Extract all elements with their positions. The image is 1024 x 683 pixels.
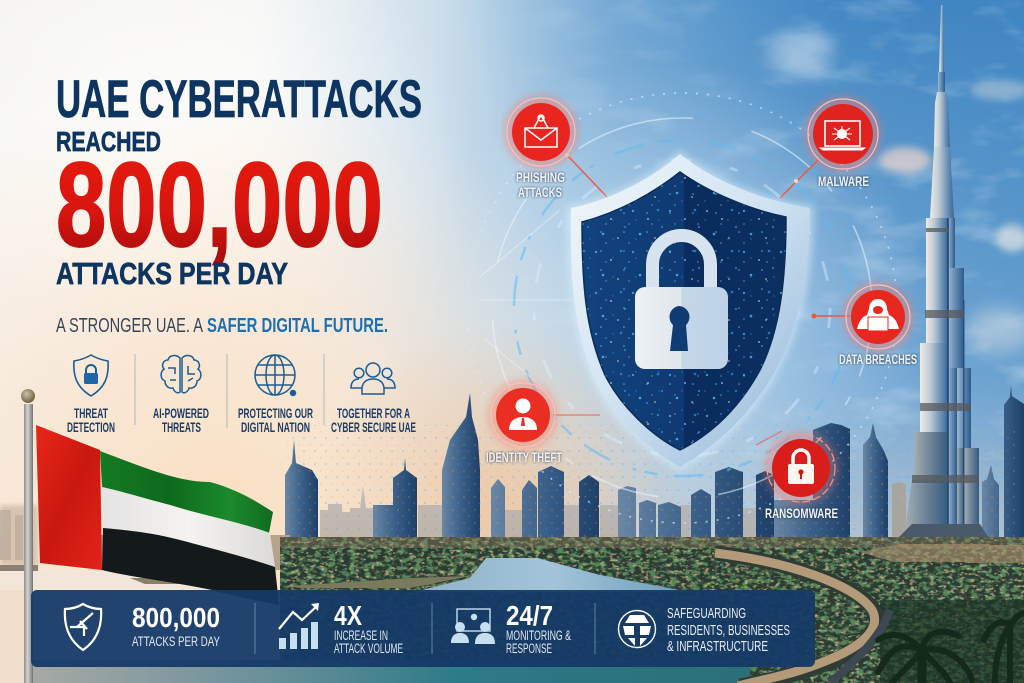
- central shield with padlock: [567, 150, 814, 471]
- label: data breaches: DATA BREACHES: [839, 351, 917, 367]
- caption: [667, 606, 790, 655]
- icon: shield lock: [74, 355, 108, 396]
- caption: MONITORING &: [506, 628, 571, 643]
- label: ransomware: RANSOMWARE: [765, 505, 838, 521]
- flag stripes: [36, 425, 279, 605]
- shield inner panel: [582, 172, 786, 450]
- label: malware: MALWARE: [818, 173, 869, 189]
- label: [153, 405, 209, 435]
- subheading: attacks per day: ATTACKS PER DAY: [56, 256, 288, 291]
- label: DETECTION: [67, 419, 115, 435]
- label: AI-POWERED: [153, 405, 209, 421]
- threat: phishing attacks: [504, 95, 578, 200]
- value: 24/7: [506, 600, 553, 631]
- connector lines to threats: [553, 153, 850, 445]
- label: identity theft: IDENTITY THEFT: [486, 449, 562, 465]
- icon: hooded hacker: [857, 299, 899, 331]
- caption: SAFEGUARDING: [667, 606, 746, 622]
- skyline: city towers: [285, 385, 1024, 538]
- subheading: reached: REACHED: [56, 126, 161, 157]
- label: [67, 405, 115, 435]
- caption: ATTACKS PER DAY: [132, 634, 220, 649]
- padlock: [635, 236, 728, 369]
- caption: RESPONSE: [506, 641, 552, 656]
- icon: shield crack: [65, 604, 101, 650]
- UAE flag on pole: [21, 389, 279, 683]
- icon: globe: [255, 355, 296, 396]
- label: PROTECTING OUR: [238, 405, 313, 421]
- icon: envelope: [525, 115, 557, 147]
- river and lagoon water: [0, 558, 750, 683]
- label: phishing: ATTACKS: [518, 184, 562, 200]
- threat: identity theft: [486, 380, 562, 465]
- icon: person: [509, 398, 537, 430]
- stats bar: [31, 590, 815, 667]
- headline number: 800,000: [56, 138, 383, 272]
- tagline: SAFER DIGITAL FUTURE.: [207, 315, 388, 337]
- tagline: [56, 315, 388, 337]
- feature: together for a cyber secure UAE: [331, 363, 416, 435]
- label: THREAT: [74, 405, 108, 421]
- label: phishing: [516, 169, 565, 200]
- stat: monitoring: [451, 600, 571, 656]
- threat: ransomware: [764, 431, 838, 521]
- curved highway: [715, 553, 890, 683]
- shield rim: [571, 154, 810, 467]
- flag pole: [21, 389, 35, 683]
- icon: globe: [618, 610, 656, 648]
- cyber rings around shield: [379, 5, 985, 611]
- Burj Khalifa tower: [896, 5, 990, 540]
- stat: safeguarding: [618, 606, 790, 655]
- feature: protecting our digital nation: [238, 355, 313, 435]
- caption: [506, 628, 571, 656]
- caption: [334, 628, 403, 656]
- icon: brain: [161, 356, 201, 393]
- threat: malware: [805, 96, 881, 189]
- label: THREATS: [162, 419, 201, 435]
- icon: padlock: [788, 450, 814, 484]
- label: CYBER SECURE UAE: [331, 419, 416, 435]
- icon: rising chart: [279, 603, 319, 649]
- icon: infected laptop: [820, 121, 865, 150]
- caption: ATTACK VOLUME: [334, 641, 403, 656]
- title: UAE CYBERATTACKS: [56, 70, 422, 129]
- label: [331, 405, 416, 435]
- caption: INCREASE IN: [334, 628, 388, 643]
- label: TOGETHER FOR A: [337, 405, 410, 421]
- caption: & INFRASTRUCTURE: [667, 639, 768, 655]
- label: phishing: PHISHING: [516, 169, 565, 185]
- stat: increase: [279, 600, 403, 656]
- threat: data breaches: [839, 282, 917, 367]
- stat: attacks per day: [65, 602, 220, 650]
- caption: RESIDENTS, BUSINESSES: [667, 623, 790, 639]
- icon: people: [351, 363, 395, 394]
- value: 800,000: [132, 602, 220, 633]
- value: 4X: [334, 600, 362, 631]
- shield data particles: [580, 170, 790, 455]
- feature: AI-powered threats: [153, 356, 209, 435]
- waterfront land and city: [0, 505, 1024, 683]
- label: DIGITAL NATION: [241, 419, 310, 435]
- label: [238, 405, 313, 435]
- tagline: A STRONGER UAE. A: [56, 315, 203, 337]
- skyline: distant haze buildings: [0, 486, 756, 560]
- palm trees: [878, 612, 1024, 683]
- feature: threat detection: [67, 355, 115, 435]
- icon: monitoring team: [451, 609, 495, 644]
